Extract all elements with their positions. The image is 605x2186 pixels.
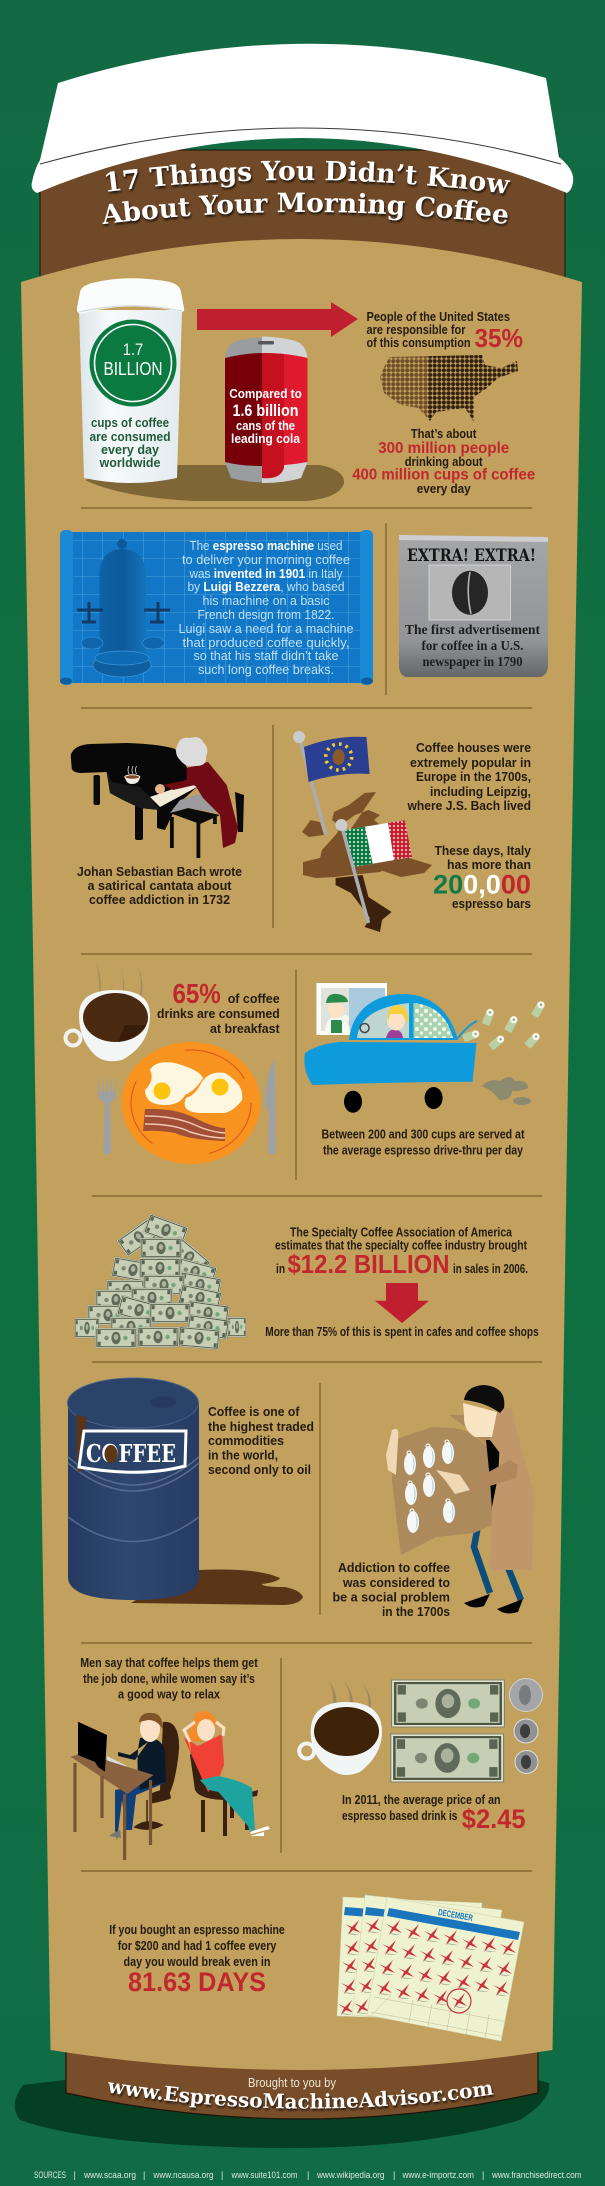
cup caption: every day — [101, 443, 159, 457]
text: commodities — [208, 1405, 314, 1477]
can caption: cans of the — [236, 419, 295, 433]
text: Italy espresso bars: has more than — [447, 858, 531, 872]
cup caption: are consumed — [90, 430, 170, 444]
text: people and cups: 400 million cups of coffee — [352, 466, 535, 484]
text: men and women: the job done, while women say it’s — [83, 1672, 255, 1686]
text: addiction: Addiction to coffee — [338, 1561, 450, 1575]
sources: | — [393, 2170, 395, 2180]
text: 65 percent: 65% — [172, 978, 221, 1009]
cup caption — [90, 416, 170, 470]
sources: | — [143, 2170, 145, 2180]
calendar sheet middle — [352, 1895, 502, 2025]
blueprint text: The espresso machine used — [190, 539, 343, 553]
text: coffee houses: where J.S. Bach lived — [407, 799, 531, 813]
text: Bach: coffee addiction in 1732 — [89, 893, 230, 907]
illustration: pile of dollar bills — [75, 1214, 246, 1350]
text: commodities: second only to oil — [208, 1463, 311, 1477]
title: About Your Morning Coffee — [102, 192, 510, 228]
cup caption: worldwide — [99, 456, 161, 470]
coffee cup: shadow at base — [15, 2080, 549, 2148]
text: commodities: the highest traded — [208, 1420, 314, 1434]
text: 65 percent: of coffee — [228, 992, 280, 1006]
illustration: coffee barrel — [68, 1378, 199, 1600]
illustration: man at desk — [71, 1713, 179, 1860]
blueprint text: to deliver your morning coffee — [182, 553, 350, 567]
coffee cup: brown body top — [40, 150, 565, 300]
blueprint text: Luigi saw a need for a machine — [178, 622, 354, 636]
monitor — [78, 1722, 107, 1772]
can caption: Compared to — [229, 387, 302, 401]
icon: breakfast plate — [122, 1042, 260, 1164]
blueprint text: by Luigi Bezzera, who based — [188, 580, 345, 594]
sources: | — [307, 2170, 309, 2180]
cups on coat lining — [404, 1440, 455, 1533]
text: specialty coffee: The Specialty Coffee Association of America — [290, 1226, 513, 1240]
text: specialty coffee — [275, 1226, 528, 1279]
text: drive-thru: the average espresso drive-thru per day — [323, 1144, 523, 1158]
icon: fork — [98, 1076, 116, 1154]
illustration: calendars — [337, 1895, 524, 2041]
calendar sheet front — [367, 1897, 524, 2041]
icon: paper cup — [77, 278, 184, 483]
blueprint text — [178, 539, 354, 677]
text: addiction — [332, 1561, 450, 1619]
can caption: 1.6 billion — [232, 401, 298, 420]
text: price: In 2011, the average price of an — [342, 1793, 501, 1807]
text: people and cups: every day — [417, 482, 471, 496]
text: 75 percent: More than 75% of this is spent in cafes and coffee shops — [265, 1325, 539, 1339]
text: men and women: Men say that coffee helps them get — [80, 1656, 258, 1670]
text: commodities: Coffee is one of — [208, 1405, 300, 1419]
badge: 1.7 billion: 1.7 — [123, 340, 143, 359]
barrel label — [79, 1431, 186, 1472]
icon: coffee bean — [452, 571, 488, 615]
kraft sleeve panel — [21, 239, 582, 2070]
text: coffee houses: Europe in the 1700s, — [416, 770, 531, 784]
cup caption: cups of coffee — [91, 416, 169, 430]
shadow under cup and can — [85, 465, 344, 501]
illustration: man selling coffee from coat — [386, 1385, 534, 1613]
text: people and cups: 300 million people — [378, 440, 509, 457]
sources: www.franchisedirect.com — [491, 2170, 582, 2180]
text: people and cups — [352, 427, 535, 496]
text: Italy espresso bars — [433, 844, 531, 911]
text: price: espresso based drink is — [342, 1809, 457, 1823]
blueprint text: such long coffee breaks. — [198, 663, 334, 677]
sources: www.ncausa.org — [153, 2170, 214, 2180]
sources: www.wikipedia.org — [316, 2170, 384, 2180]
text: addiction: in the 1700s — [382, 1605, 450, 1619]
text: Bach: Johan Sebastian Bach wrote — [77, 865, 242, 879]
barrel label: COFFEE — [86, 1439, 176, 1468]
icon: coffee cup with price — [299, 1682, 382, 1775]
text: coffee houses: including Leipzig, — [430, 785, 531, 799]
text: break even: If you bought an espresso machine — [109, 1923, 285, 1937]
flag: Italy — [335, 819, 412, 923]
text: price — [342, 1793, 526, 1834]
coffee cup: white lid — [32, 44, 573, 193]
icon: coins — [510, 1678, 542, 1774]
sources — [34, 2170, 582, 2180]
text: specialty coffee: in — [276, 1262, 285, 1276]
coffee cup: brown body bottom — [66, 2040, 538, 2119]
illustration: drive-thru window — [316, 983, 387, 1035]
icon: steaming coffee cup — [66, 962, 150, 1061]
text: 65 percent: drinks are consumed — [157, 1007, 280, 1021]
text: Italy espresso bars: 200,000 — [433, 870, 531, 900]
driver — [360, 1005, 408, 1038]
desk — [71, 1753, 154, 1860]
panel: newspaper: EXTRA! EXTRA! — [407, 546, 536, 566]
illustration: woman relaxing — [184, 1711, 270, 1836]
text: 65 percent — [157, 978, 281, 1036]
panel: newspaper — [399, 535, 548, 677]
text: coffee houses — [407, 741, 531, 813]
calendar sheet back — [337, 1897, 482, 2020]
text: specialty coffee: estimates that the specialty coffee industry brought — [275, 1238, 528, 1252]
text: US share: People of the United States — [366, 310, 510, 324]
icon: knife — [265, 1058, 276, 1154]
text: coffee houses: extremely popular in — [410, 756, 531, 770]
icon: two dollar bills — [391, 1680, 504, 1782]
text: break even — [109, 1923, 285, 1997]
blueprint text: so that his staff didn’t take — [194, 649, 339, 663]
text: coffee houses: Coffee houses were — [416, 741, 531, 755]
text: Italy espresso bars: These days, Italy — [434, 844, 531, 858]
text: US share: of this consumption — [366, 336, 470, 350]
title — [102, 160, 512, 228]
map: dotted USA — [380, 355, 518, 422]
panel: newspaper: for coffee in a U.S. — [422, 639, 524, 654]
map: Europe — [302, 792, 432, 932]
text: specialty coffee: in sales in 2006. — [453, 1262, 528, 1276]
blueprint text: French design from 1822. — [198, 608, 334, 622]
calendar sheet front: DECEMBER — [437, 1907, 474, 1923]
text: addiction: was considered to — [342, 1576, 450, 1590]
sources: www.e-importz.com — [402, 2170, 474, 2180]
sources: | — [221, 2170, 223, 2180]
text: Bach: a satirical cantata about — [88, 879, 232, 893]
panel: newspaper: The first advertisement — [405, 623, 540, 638]
text: Bach — [77, 865, 242, 907]
can caption — [229, 387, 302, 446]
flag: European Union — [293, 731, 370, 835]
text: men and women: a good way to relax — [118, 1688, 220, 1702]
panel: blueprint espresso machine — [60, 530, 373, 685]
blueprint text: his machine on a basic — [202, 594, 330, 608]
badge: 1.7 billion — [90, 320, 176, 406]
machine drawing — [77, 539, 170, 677]
title: 17 Things You Didn’t Know — [106, 160, 512, 196]
text: break even: day you would break even in — [124, 1955, 270, 1969]
icon: exhaust smoke — [482, 1077, 531, 1105]
website url: www.EspressoMachineAdvisor.com — [108, 2082, 496, 2112]
text: break even: for $200 and had 1 coffee every — [118, 1939, 276, 1953]
icon: cola can — [225, 336, 308, 483]
text: drive-thru — [322, 1128, 525, 1158]
dividers — [81, 508, 542, 1871]
text: people and cups: drinking about — [405, 455, 483, 469]
text: break even: 81.63 DAYS — [128, 1967, 266, 1997]
arrow: down — [375, 1283, 429, 1323]
icon: coffee cup on piano — [125, 766, 140, 784]
text: US share — [366, 310, 523, 353]
brought to you by: Brought to you by — [248, 2076, 337, 2090]
text: men and women — [80, 1656, 258, 1702]
barista — [325, 994, 350, 1033]
text: US share: 35% — [474, 323, 523, 353]
illustration: car — [304, 994, 477, 1113]
badge: 1.7 billion: BILLION — [104, 358, 162, 379]
blueprint text: was invented in 1901 in Italy — [189, 567, 343, 581]
text: price: $2.45 — [462, 1804, 526, 1834]
text: 65 percent: at breakfast — [210, 1022, 281, 1036]
can caption: leading cola — [231, 432, 301, 446]
blueprint text: that produced coffee quickly, — [182, 636, 350, 650]
icon: flying cups — [462, 1000, 546, 1051]
panel: newspaper: newspaper in 1790 — [422, 655, 522, 670]
arrow: cup to USA — [197, 302, 358, 337]
text: specialty coffee: $12.2 BILLION — [288, 1249, 450, 1279]
sources: | — [74, 2170, 76, 2180]
text: commodities: commodities — [208, 1434, 284, 1448]
sources: www.suite101.com — [231, 2170, 298, 2180]
sources: www.scaa.org — [83, 2170, 136, 2180]
sources: SOURCES — [34, 2170, 66, 2180]
illustration: spilled coffee puddle — [131, 1570, 303, 1605]
text: people and cups: That’s about — [411, 427, 477, 441]
illustration: Bach at the piano — [71, 737, 244, 858]
text: addiction: be a social problem — [332, 1590, 450, 1604]
text: commodities: in the world, — [208, 1448, 278, 1462]
text: Italy espresso bars: espresso bars — [452, 897, 531, 911]
sources: | — [482, 2170, 484, 2180]
text: drive-thru: Between 200 and 300 cups are served at — [322, 1128, 525, 1142]
text: US share: are responsible for — [366, 323, 466, 337]
